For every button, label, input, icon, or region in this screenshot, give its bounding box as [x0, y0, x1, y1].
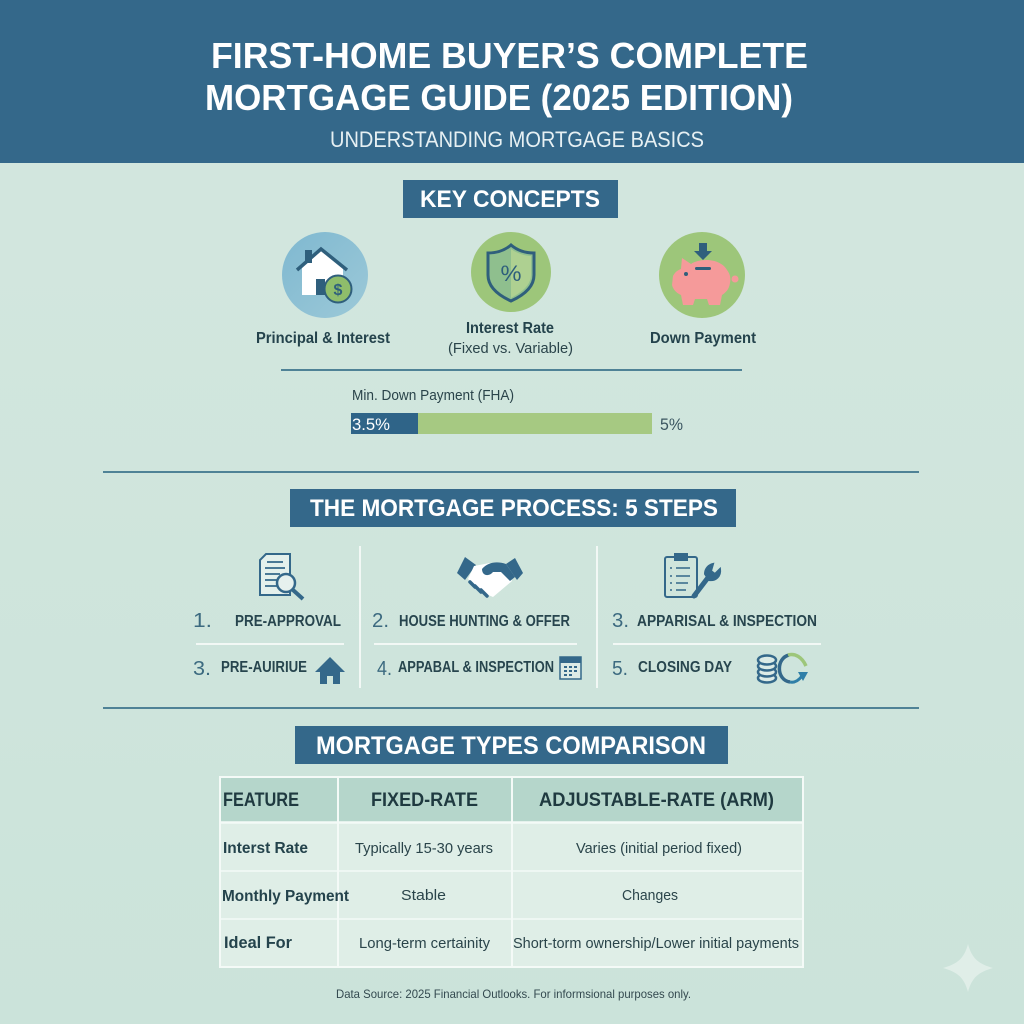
icon: clipboard with wrench — [665, 554, 720, 597]
sparkle watermark — [943, 944, 993, 992]
label: interest rate — [448, 320, 573, 357]
table header row — [223, 790, 774, 811]
icon: shield with percent — [471, 232, 551, 312]
step: pre-approval: PRE-APPROVAL — [235, 613, 341, 630]
step: closing day: 5. — [612, 658, 628, 680]
heading: key concepts: KEY CONCEPTS — [420, 186, 600, 213]
table header row: ADJUSTABLE-RATE (ARM) — [539, 790, 774, 811]
bar chart: minimum down payment: 3.5% — [352, 415, 390, 434]
row: ideal for: Ideal For — [224, 933, 292, 952]
title: FIRST-HOME BUYER’S COMPLETE — [211, 35, 808, 76]
icon: handshake — [457, 557, 523, 597]
step: closing day — [612, 658, 733, 680]
icon: shield with percent: % — [500, 261, 522, 286]
step: appraisal and inspection — [612, 610, 817, 632]
icon: house with dollar coin: $ — [334, 282, 343, 299]
bar chart: minimum down payment — [351, 388, 683, 434]
step: closing day: CLOSING DAY — [638, 659, 733, 676]
label: interest rate: Interest Rate — [466, 320, 554, 337]
icon: coins with cycle arrows — [758, 654, 808, 682]
step: house hunting and offer: 2. — [372, 610, 389, 632]
step: appraisal and inspection: 3. — [612, 610, 629, 632]
subtitle: UNDERSTANDING MORTGAGE BASICS — [330, 127, 704, 152]
step: appraisal and inspection 4 — [377, 658, 554, 680]
bar chart: minimum down payment: Min. Down Payment (FHA) — [352, 388, 514, 404]
footer source note: Data Source: 2025 Financial Outlooks. For informsional purposes only. — [336, 987, 691, 1001]
row: monthly payment: Changes — [622, 887, 678, 904]
step: pre-auirue — [193, 658, 307, 680]
bar chart: minimum down payment: 5% — [660, 415, 683, 434]
step: appraisal and inspection: APPARISAL & INSPECTION — [637, 613, 817, 630]
label: interest rate: (Fixed vs. Variable) — [448, 340, 573, 357]
step: house hunting and offer: HOUSE HUNTING & OFFER — [399, 613, 570, 630]
icon: house with dollar coin — [282, 232, 368, 318]
row: monthly payment: Monthly Payment — [222, 888, 349, 905]
heading: mortgage process: THE MORTGAGE PROCESS: 5 STEPS — [310, 495, 718, 522]
row: monthly payment: Stable — [401, 887, 446, 904]
step: pre-approval: 1. — [193, 610, 212, 632]
icon: calendar — [560, 657, 581, 679]
heading: mortgage types comparison — [295, 726, 728, 764]
step: pre-approval — [193, 610, 341, 632]
heading: key concepts — [403, 180, 618, 218]
row: ideal for: Long-term certainity — [359, 935, 490, 952]
row: ideal for — [224, 933, 799, 952]
title — [205, 35, 808, 118]
row: interest rate: Varies (initial period fixed) — [576, 840, 742, 857]
dividers — [196, 546, 821, 688]
row: ideal for: Short-torm ownership/Lower initial payments — [513, 935, 799, 952]
table header row: FEATURE — [223, 790, 299, 811]
icon: document with magnifier — [260, 554, 303, 599]
heading: mortgage process — [290, 489, 736, 527]
title: MORTGAGE GUIDE (2025 EDITION) — [205, 77, 793, 118]
label: principal and interest: Principal & Interest — [256, 330, 390, 347]
step: pre-auirue: 3. — [193, 658, 211, 680]
icon: piggy bank — [659, 232, 745, 318]
row: monthly payment — [222, 887, 678, 905]
table header row: FIXED-RATE — [371, 790, 478, 811]
label: down payment: Down Payment — [650, 330, 756, 347]
step: house hunting and offer — [372, 610, 570, 632]
header banner — [0, 0, 1024, 163]
row: interest rate: Typically 15-30 years — [355, 840, 493, 857]
row: interest rate: Interst Rate — [223, 840, 308, 857]
heading: mortgage types comparison: MORTGAGE TYPES COMPARISON — [316, 732, 706, 760]
row: interest rate — [223, 840, 742, 857]
comparison table — [220, 777, 803, 967]
step: appraisal and inspection 4: 4. — [377, 658, 392, 680]
icon: house — [315, 657, 345, 684]
step: appraisal and inspection 4: APPABAL & INSPECTION — [398, 659, 554, 676]
step: pre-auirue: PRE-AUIRIUE — [221, 659, 307, 676]
